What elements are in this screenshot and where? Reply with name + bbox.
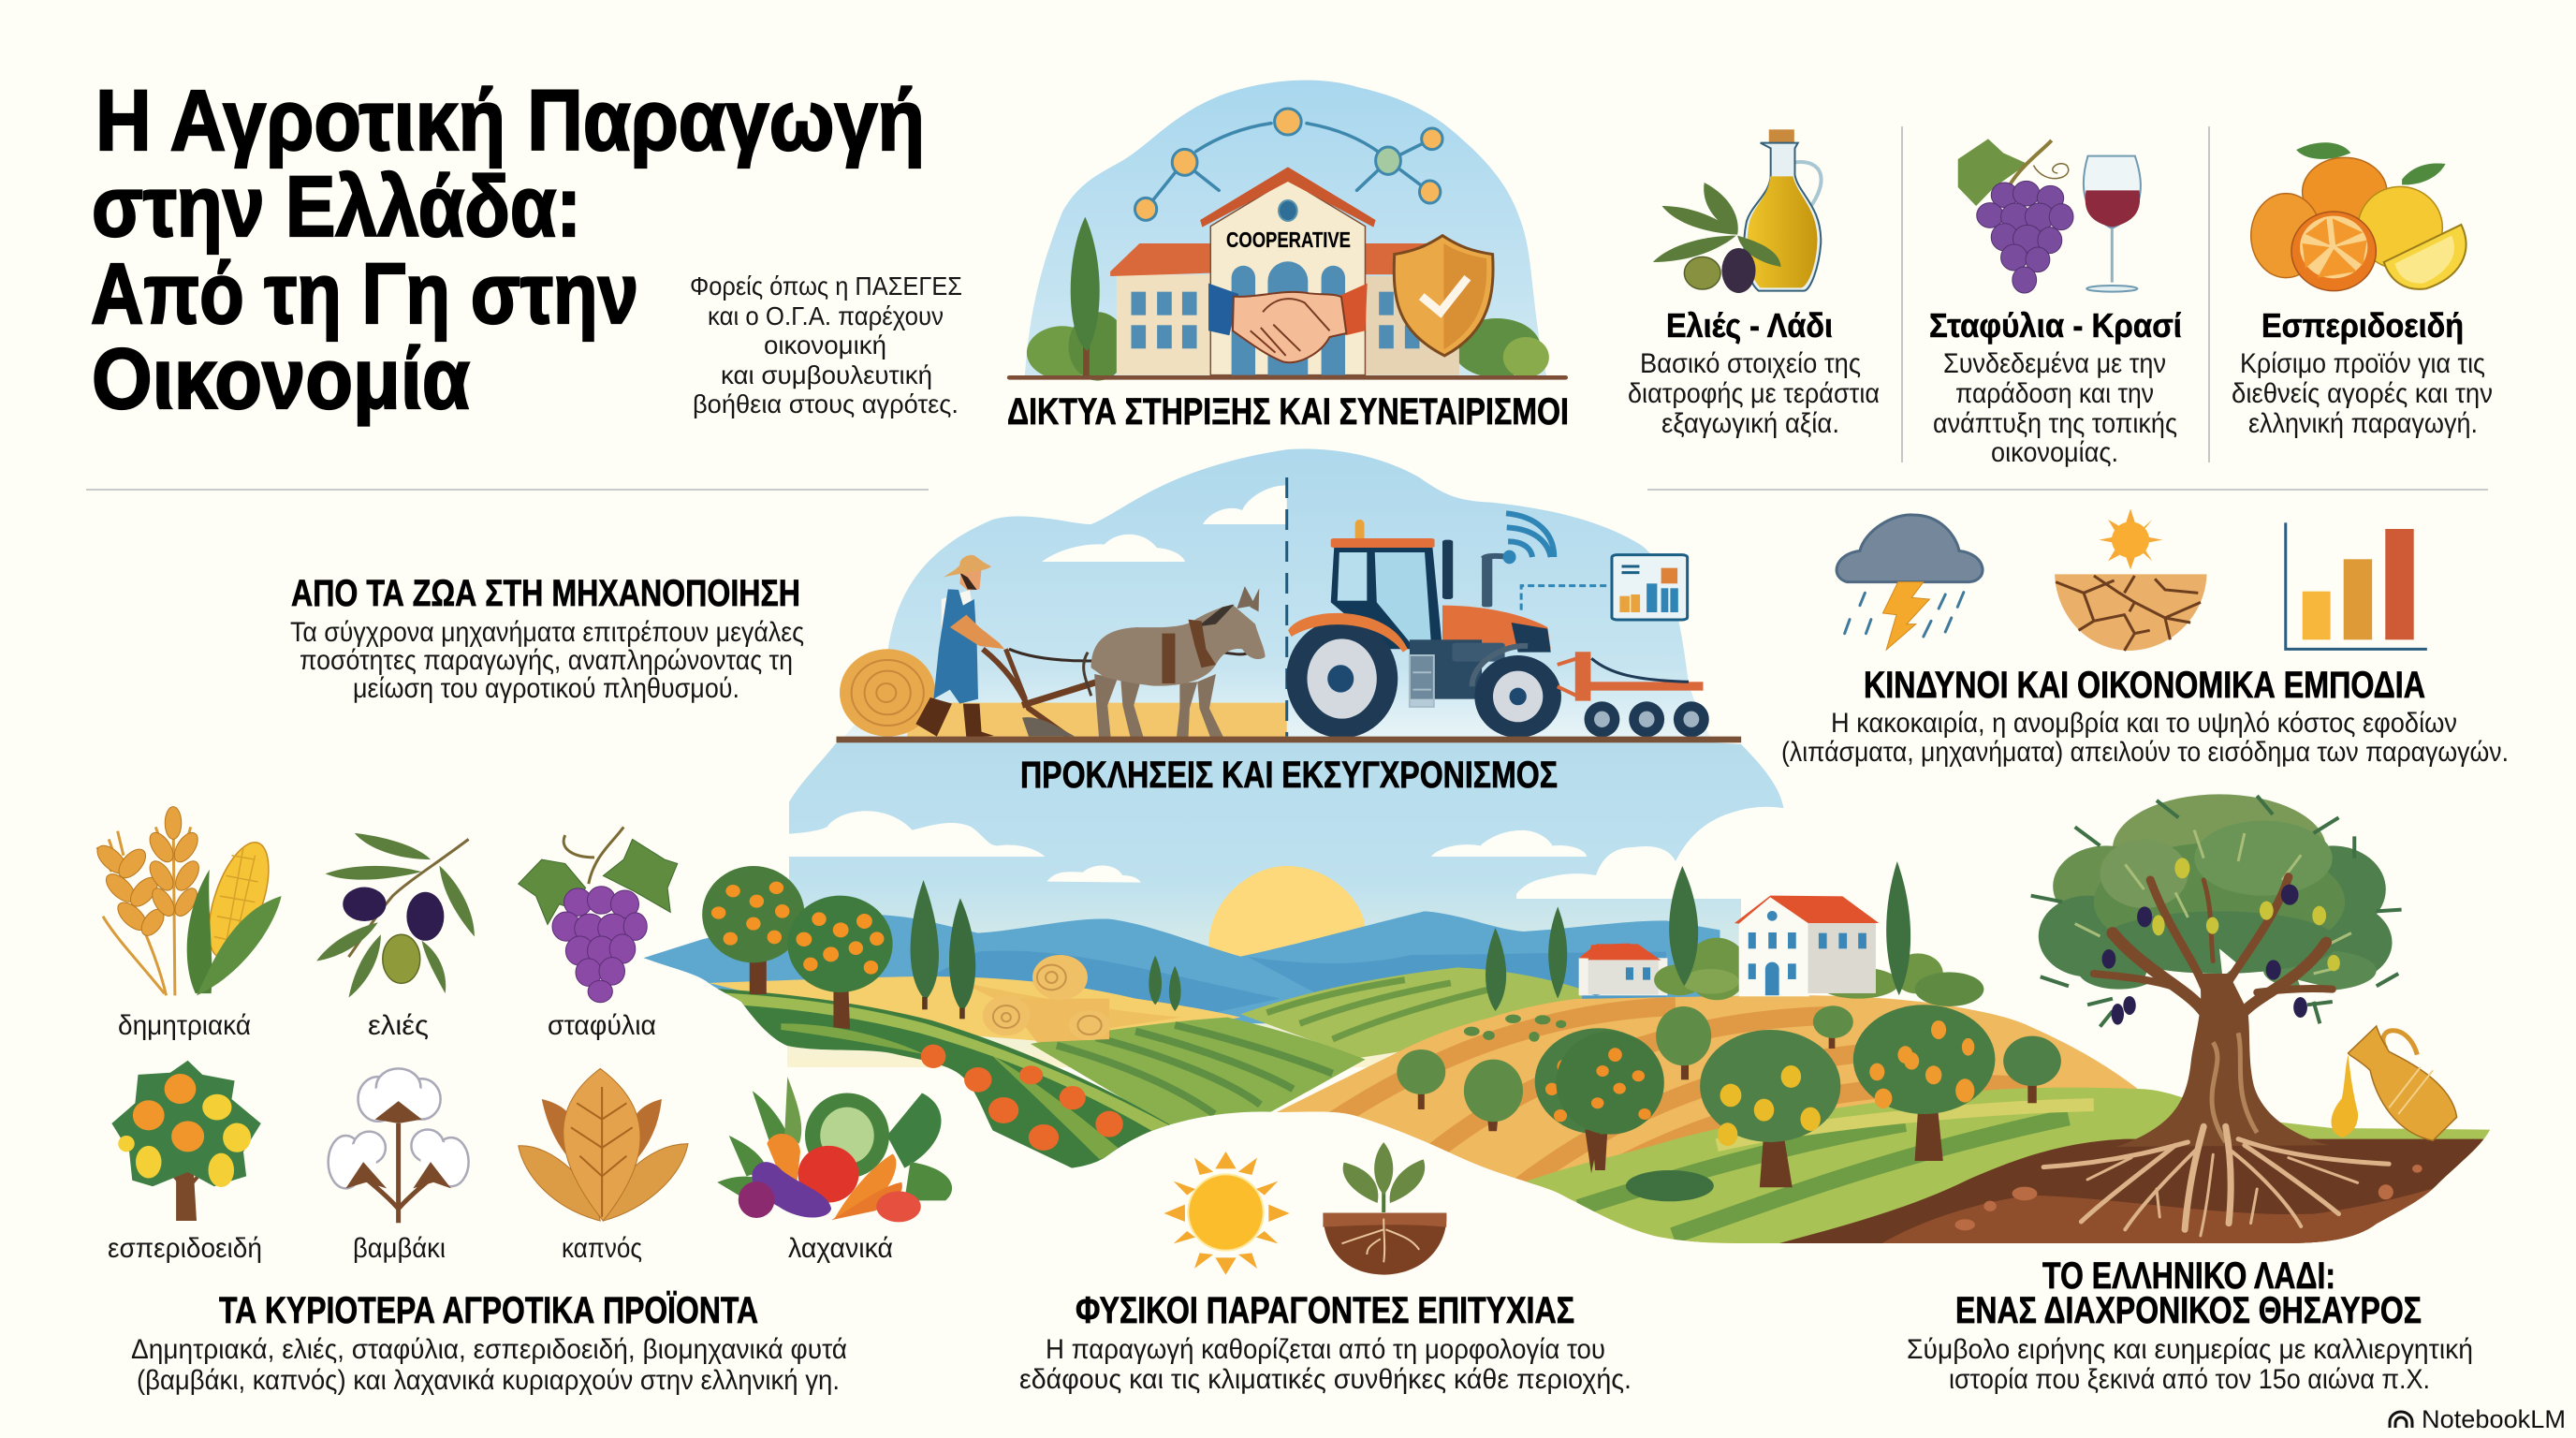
olive tree	[2031, 794, 2402, 1236]
text block: support organisations: οικονομική	[764, 330, 886, 360]
product: grapes and wine: Σταφύλια - Κρασί	[1929, 306, 2182, 345]
panel: modernisation illustration	[789, 448, 1784, 887]
icon: cotton	[329, 1068, 469, 1223]
product: olives and oil: Ελιές - Λάδι	[1666, 306, 1833, 345]
text block: risks and economic barriers	[1781, 665, 2509, 768]
product labels: βαμβάκι	[353, 1233, 446, 1264]
title: Οικονομία	[92, 331, 470, 427]
amphora with oil	[2331, 1026, 2457, 1140]
donkey	[1084, 586, 1266, 738]
bushes	[1027, 312, 1549, 381]
text block: natural success factors	[1019, 1290, 1632, 1395]
icon: tobacco leaves	[519, 1068, 688, 1221]
central hall	[1200, 167, 1376, 375]
icon: olive oil bottle	[1653, 129, 1822, 293]
panel: natural factors icons	[1164, 1142, 1446, 1275]
product: olives and oil: διατροφής με τεράστια	[1628, 378, 1880, 409]
orange furrows	[1329, 1006, 2031, 1189]
text block: from animals to mechanisation: ποσότητες παραγωγής, αναπληρώνοντας τη	[300, 645, 793, 676]
cypress	[1071, 217, 1100, 376]
icon: cereals	[92, 807, 282, 995]
canopy	[2031, 794, 2402, 1027]
text block: from animals to mechanisation	[290, 573, 804, 704]
text block: main agricultural products: ΤΑ ΚΥΡΙΟΤΕΡΑ ΑΓΡΟΤΙΚΑ ΠΡΟΪΟΝΤΑ	[219, 1290, 758, 1331]
soil	[1779, 1138, 2484, 1243]
left terrain objects	[702, 866, 1667, 1170]
implement	[1558, 653, 1709, 737]
text block: support organisations: και συμβουλευτική	[721, 360, 932, 389]
text block: natural success factors: Η παραγωγή καθορίζεται από τη μορφολογία του	[1046, 1334, 1605, 1365]
product: grapes and wine: ανάπτυξη της τοπικής	[1933, 408, 2177, 439]
product: olives and oil	[1628, 306, 1880, 439]
front green field	[1031, 1018, 1366, 1130]
text block: from animals to mechanisation: ΑΠΟ ΤΑ ΖΩΑ ΣΤΗ ΜΗΧΑΝΟΠΟΙΗΣΗ	[291, 573, 800, 614]
icon: grapes and wine	[1958, 139, 2141, 293]
text block: greek olive oil: Σύμβολο ειρήνης και ευημερίας με καλλιεργητική	[1907, 1334, 2473, 1365]
farmhouse	[1734, 896, 1879, 996]
shield	[1394, 236, 1493, 356]
icon: rising cost chart	[2286, 522, 2427, 649]
handshake	[1208, 284, 1368, 362]
back green field	[1240, 967, 1582, 1058]
title	[91, 73, 925, 427]
right hill green	[1497, 1088, 2496, 1255]
text block: natural success factors: εδάφους και τις κλιματικές συνθήκες κάθε περιοχής.	[1019, 1364, 1632, 1395]
dashed divider	[1285, 477, 1288, 737]
icon: data dashboard	[1521, 555, 1688, 620]
cooperative sign: COOPERATIVE	[1226, 227, 1351, 252]
right hill orange	[1273, 995, 2162, 1255]
plough and harness	[983, 649, 1249, 737]
right wing	[1365, 243, 1459, 375]
icon: grapes	[519, 827, 678, 1003]
text block: greek olive oil: ΕΝΑΣ ΔΙΑΧΡΟΝΙΚΟΣ ΘΗΣΑΥΡΟΣ	[1955, 1290, 2422, 1331]
icon: citrus tree	[111, 1061, 261, 1221]
icon: drought soil	[2055, 508, 2207, 651]
yellow field	[709, 976, 1240, 1046]
clouds	[1042, 485, 1287, 562]
product labels: ελιές	[368, 1010, 429, 1041]
mountains	[643, 911, 1720, 1023]
panel: landscape	[643, 794, 2496, 1255]
icon: olive branch	[316, 833, 475, 998]
right terrain objects	[1556, 794, 2457, 1236]
product: citrus: ελληνική παραγωγή.	[2248, 408, 2478, 439]
icon: wireless signal	[1503, 513, 1554, 564]
sun	[1208, 866, 1366, 961]
icon: sun	[1164, 1152, 1290, 1275]
heading: support networks: ΔΙΚΤΥΑ ΣΤΗΡΙΞΗΣ ΚΑΙ ΣΥΝΕΤΑΙΡΙΣΜΟΙ	[1007, 391, 1569, 433]
product labels: λαχανικά	[788, 1233, 893, 1264]
sky blob	[1025, 81, 1547, 377]
small house	[1579, 944, 1667, 995]
icon: vegetables	[717, 1077, 952, 1222]
roots	[2043, 1126, 2389, 1236]
text block: natural success factors: ΦΥΣΙΚΟΙ ΠΑΡΑΓΟΝΤΕΣ ΕΠΙΤΥΧΙΑΣ	[1076, 1290, 1574, 1331]
product: citrus: Κρίσιμο προϊόν για τις	[2240, 348, 2485, 379]
hillside trees	[1397, 1028, 1662, 1170]
panel: risk icons	[1837, 508, 2427, 651]
product: olives and oil: Βασικό στοιχείο της	[1640, 348, 1861, 379]
product: grapes and wine: παράδοση και την	[1955, 378, 2154, 409]
icon: storm cloud	[1837, 515, 1983, 650]
product labels: σταφύλια	[548, 1010, 656, 1041]
product: grapes and wine: Συνδεδεμένα με την	[1943, 348, 2166, 379]
text block: support organisations: βοήθεια στους αγρότες.	[693, 389, 959, 418]
text block: greek olive oil: ΤΟ ΕΛΛΗΝΙΚΟ ΛΑΔΙ:	[2042, 1255, 2335, 1297]
text block: main agricultural products	[131, 1290, 847, 1396]
text block: support organisations	[690, 271, 962, 418]
text block: main agricultural products: Δημητριακά, ελιές, σταφύλια, εσπεριδοειδή, βιομηχανικά φυτά	[131, 1334, 847, 1365]
panel: main products grid	[92, 807, 952, 1223]
tractor	[1286, 520, 1561, 738]
hay bale	[840, 649, 935, 737]
hay bales	[983, 955, 1110, 1042]
title: στην Ελλάδα:	[92, 159, 581, 255]
network nodes	[1134, 109, 1442, 220]
title: Από τη Γη στην	[91, 246, 638, 342]
text block: greek olive oil	[1907, 1255, 2473, 1395]
big cloud	[1516, 807, 1835, 899]
product: citrus	[2232, 306, 2493, 439]
text block: from animals to mechanisation: Τα σύγχρονα μηχανήματα επιτρέπουν μεγάλες	[290, 617, 804, 648]
title: Η Αγροτική Παραγωγή	[95, 73, 925, 169]
text block: risks and economic barriers: Η κακοκαιρία, η ανομβρία και το υψηλό κόστος εφοδίων	[1831, 708, 2457, 739]
icon: citrus fruits	[2251, 142, 2466, 291]
product labels: δημητριακά	[118, 1010, 251, 1041]
tomatoes	[921, 1045, 1123, 1151]
product: citrus: διεθνείς αγορές και την	[2232, 378, 2493, 409]
olives	[2102, 858, 2340, 1025]
icon: seedling in soil	[1323, 1142, 1446, 1275]
panel: cooperative illustration	[1007, 81, 1568, 381]
text block: support organisations: Φορείς όπως η ΠΑΣΕΓΕΣ	[690, 271, 962, 301]
field	[907, 703, 1287, 738]
grass tufts	[1464, 1015, 1566, 1042]
product labels	[108, 1010, 893, 1264]
ground bar	[1007, 375, 1568, 380]
left wing	[1110, 243, 1210, 375]
small house right side	[1588, 944, 1659, 994]
farmer	[915, 555, 1004, 738]
product labels: καπνός	[562, 1233, 642, 1264]
product: grapes and wine	[1929, 306, 2182, 468]
orchard trees	[1556, 1005, 2061, 1201]
sky blob	[789, 448, 1784, 887]
cypresses	[1669, 861, 1910, 995]
text block: main agricultural products: (βαμβάκι, καπνός) και λαχανικά κυριαρχούν στην ελληνική γη.	[137, 1365, 840, 1396]
bushes behind house	[1654, 938, 1983, 1006]
orange tree 2	[787, 896, 893, 1029]
heading: challenges and modernisation: ΠΡΟΚΛΗΣΕΙΣ ΚΑΙ ΕΚΣΥΓΧΡΟΝΙΣΜΟΣ	[1020, 755, 1558, 796]
cypress group	[911, 880, 1567, 1019]
sky	[787, 885, 1793, 1067]
product labels: εσπεριδοειδή	[108, 1233, 262, 1264]
ground bar	[836, 737, 1741, 742]
product: citrus: Εσπεριδοειδή	[2261, 306, 2464, 345]
text block: risks and economic barriers: (λιπάσματα, μηχανήματα) απειλούν το εισόδημα των παραγωγών.	[1781, 737, 2509, 768]
orange tree 1	[702, 866, 805, 992]
text block: greek olive oil: ιστορία που ξεκινά από τον 15ο αιώνα π.Χ.	[1949, 1364, 2430, 1395]
trunk	[2094, 877, 2333, 1147]
text block: support organisations: και ο Ο.Γ.Α. παρέχουν	[708, 301, 944, 330]
panel: top products icons	[1653, 129, 2466, 293]
separators between product columns	[1902, 126, 2209, 462]
text block: risks and economic barriers: ΚΙΝΔΥΝΟΙ ΚΑΙ ΟΙΚΟΝΟΜΙΚΑ ΕΜΠΟΔΙΑ	[1864, 665, 2425, 706]
text block: from animals to mechanisation: μείωση του αγροτικού πληθυσμού.	[353, 673, 739, 704]
clipped terrain	[643, 866, 2496, 1255]
product: olives and oil: εξαγωγική αξία.	[1661, 408, 1839, 439]
clouds	[774, 811, 1587, 883]
left green hill	[717, 989, 1170, 1168]
divider lines	[86, 489, 2488, 491]
product: grapes and wine: οικονομίας.	[1991, 437, 2118, 468]
far hills group	[643, 866, 1720, 1180]
brand mark: NotebookLM: NotebookLM	[2422, 1405, 2566, 1433]
